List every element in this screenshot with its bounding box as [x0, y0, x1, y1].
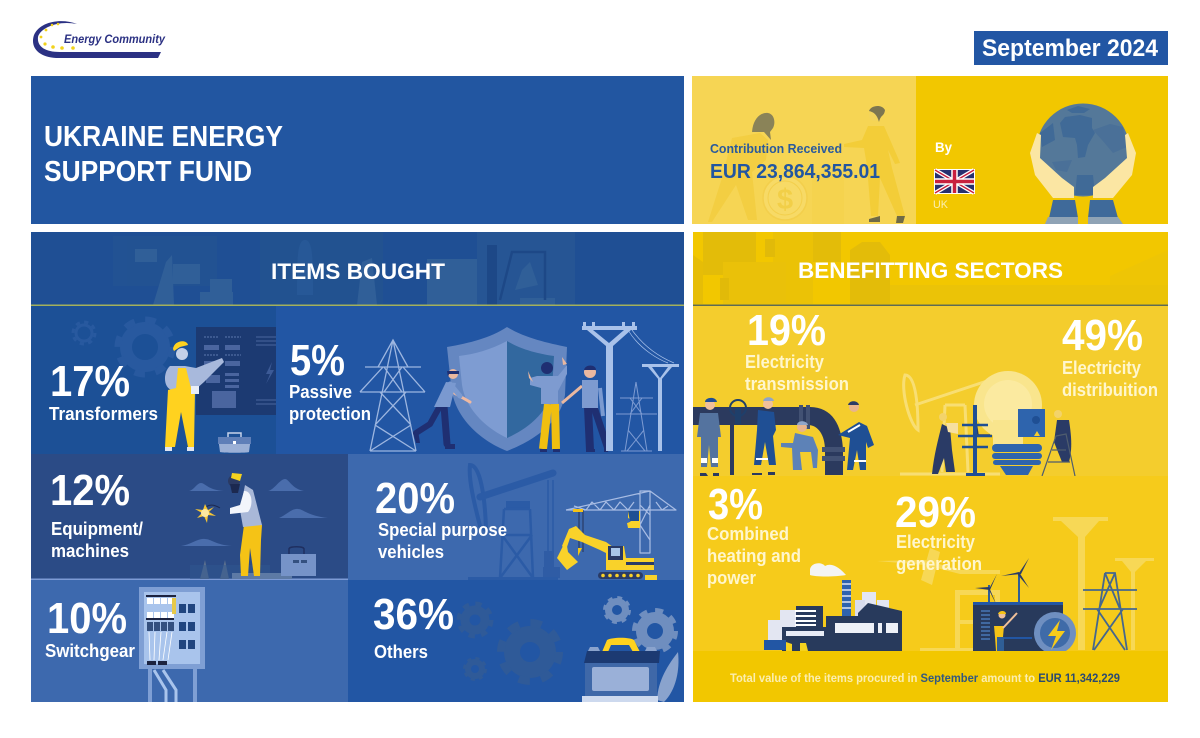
icon: leaf [657, 652, 678, 702]
text: UK: UK [933, 199, 949, 211]
stat: passive protection: Passive [289, 382, 352, 402]
illustration: crane [566, 491, 676, 553]
illustration: people with coin [708, 106, 905, 224]
panel: equipment/machines [31, 454, 348, 580]
illustration: switchgear cabinet [139, 587, 205, 702]
text: contribution amount: EUR 23,864,355.01 [710, 161, 880, 183]
stat: others: Others [374, 642, 428, 662]
stat: equipment/machines: machines [51, 541, 129, 561]
stat: special purpose vehicles: Special purpose [378, 520, 507, 540]
panel: contribution received [692, 76, 916, 224]
icon: battery [582, 638, 660, 702]
illustration: pylon [360, 340, 425, 451]
icon: background gears [73, 320, 172, 374]
stat: transformers: Transformers [49, 404, 158, 424]
panel: benefitting sectors header [693, 232, 1168, 306]
panel: switchgear [31, 580, 348, 702]
illustration: people at shield [413, 357, 610, 452]
panel: transformers [31, 306, 276, 454]
illustration: people with coin: $ [777, 184, 793, 216]
illustration: control panel [196, 327, 276, 415]
stat: combined heating and power: 3% [708, 480, 763, 529]
heading: benefitting sectors: BENEFITTING SECTORS [798, 258, 1063, 283]
stat: electricity generation: generation [896, 554, 982, 574]
icon: UK flag [934, 169, 975, 194]
stat: combined heating and power [707, 480, 801, 588]
illustration: background pylons and poles [877, 517, 1154, 651]
panel: donor [916, 76, 1168, 224]
icon: hands holding globe [1030, 104, 1136, 224]
stat: electricity distribution: Electricity [1062, 358, 1141, 378]
logo: Energy Community: Energy Community [64, 34, 166, 46]
stat: switchgear: Switchgear [45, 641, 135, 661]
stat: electricity distribution: distribuition [1062, 380, 1158, 400]
text: contribution amount [710, 142, 880, 183]
illustration: pylon [1083, 573, 1137, 650]
logo: Energy Community [33, 21, 166, 58]
icon: light gears [604, 598, 675, 651]
text: total value: Total value of the items procured in September amount to EUR 11,342,229 [730, 673, 1120, 685]
stat: electricity distribution [1062, 311, 1158, 400]
stat: switchgear: 10% [47, 594, 127, 643]
panel: sectors lower [693, 476, 1168, 654]
illustration: worker with clipboard [165, 341, 224, 451]
panel: sectors upper [693, 306, 1168, 476]
stat: combined heating and power: Combined [707, 524, 789, 544]
stat: special purpose vehicles [375, 474, 507, 562]
illustration: light bulb with pylon and workers [932, 371, 1075, 476]
heading: fund name [44, 121, 283, 188]
text: contribution amount: Contribution Received [710, 142, 842, 156]
illustration: warehouse silhouettes [113, 232, 575, 305]
stat: combined heating and power: heating and [707, 546, 801, 566]
heading: items bought: ITEMS BOUGHT [271, 259, 446, 284]
panel: passive protection [276, 306, 684, 454]
stat: others [373, 590, 454, 662]
panel: items bought header [31, 232, 684, 306]
illustration: shield [447, 327, 567, 451]
heading: fund name: UKRAINE ENERGY [44, 121, 283, 153]
illustration: factory [764, 563, 902, 651]
stat: electricity generation [895, 488, 982, 574]
illustration: pipeline with workers [693, 397, 874, 476]
stat: special purpose vehicles: 20% [375, 474, 455, 523]
illustration: wind turbines and generator [973, 558, 1076, 654]
stat: special purpose vehicles: vehicles [378, 542, 444, 562]
stat: electricity transmission [745, 306, 849, 394]
stat: equipment/machines: 12% [50, 466, 130, 515]
stat: electricity distribution: 49% [1062, 311, 1143, 360]
illustration: skyline silhouettes [693, 232, 1168, 304]
icon: toolbox [218, 433, 251, 453]
stat: electricity generation: Electricity [896, 532, 975, 552]
illustration: small pylon [616, 382, 657, 451]
illustration: pump jack silhouette [468, 465, 560, 580]
illustration: background pump jack [900, 375, 1000, 474]
stat: equipment/machines: Equipment/ [51, 519, 143, 539]
stat: passive protection: protection [289, 404, 371, 424]
stat: others: 36% [373, 590, 454, 639]
stat: equipment/machines [50, 466, 143, 561]
stat: passive protection [289, 336, 371, 424]
illustration: power poles [582, 322, 679, 451]
stat: transformers: 17% [50, 357, 130, 406]
stat: electricity transmission: Electricity [745, 352, 824, 372]
icon: background gears [459, 604, 559, 681]
stat: transformers [49, 357, 158, 424]
panel: total value footer [693, 651, 1168, 702]
panel: others [348, 580, 684, 702]
stat: combined heating and power: power [707, 568, 756, 588]
illustration: excavator [557, 509, 657, 580]
stat: electricity transmission: 19% [747, 306, 826, 355]
panel: special purpose vehicles [348, 454, 684, 580]
heading: fund name: SUPPORT FUND [44, 156, 252, 188]
date badge: September 2024 [982, 35, 1159, 62]
icon: welding machine [281, 547, 316, 576]
panel: title [31, 76, 684, 224]
stat: passive protection: 5% [290, 336, 345, 385]
stat: electricity generation: 29% [895, 488, 976, 537]
illustration: clouds [181, 479, 328, 546]
illustration: welder [190, 473, 292, 579]
text: by: By [935, 139, 952, 155]
stat: electricity transmission: transmission [745, 374, 849, 394]
